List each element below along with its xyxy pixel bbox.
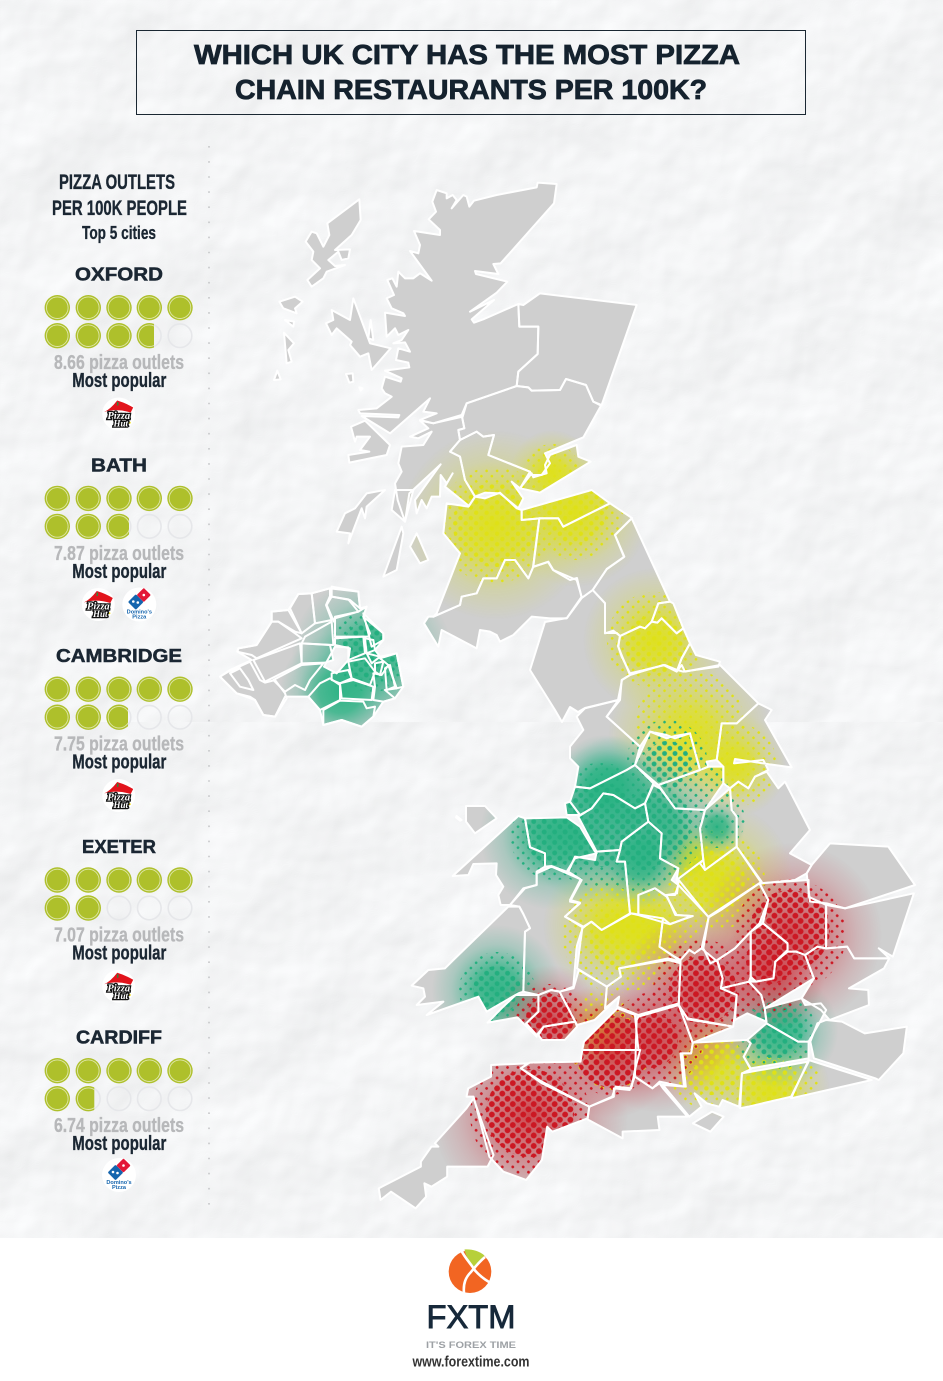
logo: FXTM footer: IT'S FOREX TIME [426, 1340, 516, 1350]
legend heading [52, 171, 187, 243]
icon: FXTM mark [449, 1249, 491, 1293]
icon: Pizza Hut logo: Pizza [107, 411, 130, 422]
icon: Pizza Hut logo: Hut [112, 800, 128, 810]
title: WHICH UK CITY HAS THE MOST PIZZA [194, 39, 740, 70]
legend heading: PER 100K PEOPLE [52, 197, 187, 220]
title [136, 30, 806, 114]
icon: Domino's logo [122, 588, 156, 622]
panel: Bath: 7.87 pizza outlets [54, 543, 184, 565]
icon: Pizza Hut logo: Pizza [107, 983, 130, 994]
logo: FXTM footer [412, 1249, 530, 1370]
icon: Domino's logo: Domino's [106, 1180, 132, 1186]
icon: Domino's logo: Pizza [132, 614, 147, 620]
icon: Domino's logo: Pizza [112, 1185, 127, 1191]
panel: Cambridge: Most popular [72, 752, 166, 774]
title: CHAIN RESTAURANTS PER 100K? [235, 74, 707, 105]
logo: FXTM footer: www.forextime.com [412, 1354, 530, 1370]
map: UK heat map [220, 183, 915, 1213]
icon: Pizza Hut logo [102, 779, 135, 812]
map regions base [220, 183, 915, 1208]
panel: Oxford: OXFORD [75, 264, 163, 285]
panel: Exeter: EXETER [82, 836, 156, 857]
panel: Cardiff: Most popular [72, 1133, 166, 1155]
panel: Exeter: Most popular [72, 942, 166, 964]
icon: Pizza Hut logo: Pizza [107, 792, 130, 804]
panel: Oxford [45, 264, 193, 430]
panel: Exeter: 7.07 pizza outlets [54, 924, 184, 946]
icon: Pizza Hut logo: Pizza [87, 602, 110, 612]
panel: Exeter [45, 836, 193, 1003]
legend heading: Top 5 cities [82, 223, 156, 243]
panel: Bath: BATH [91, 454, 147, 475]
panel: Cardiff: CARDIFF [76, 1027, 162, 1048]
panel: Cambridge: CAMBRIDGE [56, 645, 182, 666]
icon: Pizza Hut logo [102, 398, 135, 430]
icon: Pizza Hut logo [102, 970, 135, 1003]
panel: Bath: Most popular [72, 561, 166, 583]
legend heading: PIZZA OUTLETS [59, 171, 175, 194]
icon: Pizza Hut logo: Hut [92, 609, 108, 619]
panel: Oxford: Most popular [72, 370, 166, 392]
panel: Oxford: 8.66 pizza outlets [54, 352, 184, 374]
panel: Cardiff [45, 1027, 193, 1192]
icon: Pizza Hut logo: Hut [112, 418, 128, 428]
panel: Cardiff: 6.74 pizza outlets [54, 1115, 184, 1137]
icon: Pizza Hut logo [82, 588, 115, 621]
icon: Domino's logo: Domino's [127, 610, 152, 616]
panel: Cambridge: 7.75 pizza outlets [54, 734, 184, 756]
heat blobs [280, 430, 882, 1213]
logo: FXTM footer: FXTM [426, 1299, 516, 1335]
panel: Cambridge [45, 645, 193, 812]
icon: Domino's logo [102, 1158, 136, 1192]
panel: Bath [45, 454, 193, 622]
icon: Pizza Hut logo: Hut [112, 991, 128, 1001]
